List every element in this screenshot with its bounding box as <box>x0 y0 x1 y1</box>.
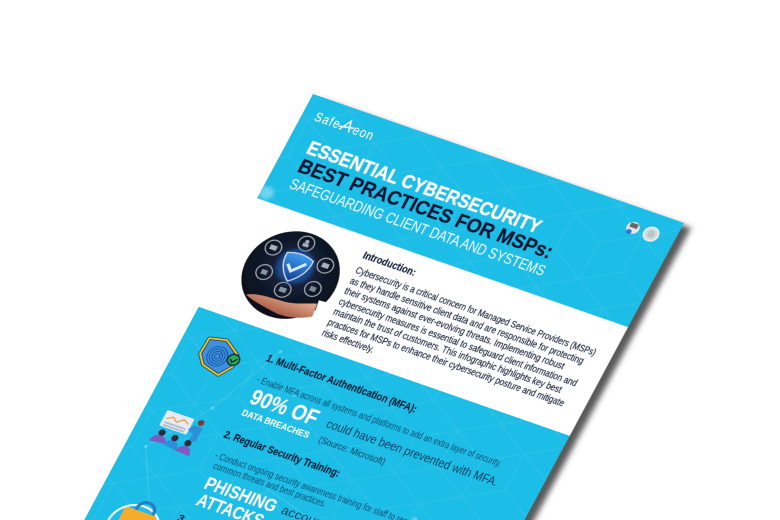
panel: blue header <box>256 94 684 328</box>
icon: central shield <box>269 244 322 289</box>
text block: introduction: Cybersecurity is a critical concern for Managed Service Providers (MSPs) <box>353 266 598 359</box>
logo: SafeAeon: Safe <box>312 110 344 132</box>
text block: enable MFA: - Enable MFA across all systems and platforms to add an extra layer of security. <box>254 375 503 470</box>
stat: 90% of data breaches: 90% OF <box>245 384 324 430</box>
icon: service rings <box>245 225 344 308</box>
text block: introduction: practices for MSPs to enhance their cybersecurity posture and mitigate <box>325 318 566 409</box>
text block: introduction: maintain the trust of customers. This infographic highlights key best <box>331 307 563 396</box>
page drop shadow <box>78 99 691 520</box>
text block: introduction: their systems against ever-evolving threats. Implementing robust <box>342 286 566 372</box>
text block: MFA stat description: (Source: Microsoft) <box>316 435 387 468</box>
infographic sheet <box>75 94 684 520</box>
image: shield and hand on dark disc <box>224 219 361 333</box>
icon: fingerprint shield <box>193 334 247 379</box>
text block: introduction <box>319 250 606 421</box>
text block: introduction: Introduction: <box>361 250 418 279</box>
title: ESSENTIAL CYBERSECURITY <box>303 138 545 238</box>
icon: padlock <box>96 494 171 520</box>
text block: introduction: as they handle sensitive client data and are responsible for protecting <box>348 276 586 367</box>
stat: 90% of data breaches: DATA BREACHES <box>240 408 311 440</box>
logo: SafeAeon: eon <box>350 123 377 143</box>
text block: MFA stat description: could have been prevented with MFA. <box>324 417 501 489</box>
panel: white introduction band <box>199 198 628 436</box>
text block: introduction: cybersecurity measures is essential to safeguard client information and <box>336 297 579 389</box>
text block: introduction: risks effectively. <box>320 328 376 355</box>
text block: conduct training: common threats and best practices. <box>211 461 328 510</box>
heading: multi-factor authentication: 1. Multi-Factor Authentication (MFA): <box>264 353 419 415</box>
stat: phishing attacks: PHISHING <box>201 473 281 516</box>
logo: SafeAeon <box>312 110 377 143</box>
title: SAFEGUARDING CLIENT DATA AND SYSTEMS <box>286 176 548 280</box>
icon: certification badges <box>623 219 661 243</box>
icon: training team <box>148 408 207 456</box>
icon: open hand <box>242 277 332 328</box>
panel: blue best practices section <box>84 307 570 520</box>
heading: regular security training: 2. Regular Security Training: <box>222 429 342 479</box>
title: BEST PRACTICES FOR MSPs: <box>294 154 558 263</box>
